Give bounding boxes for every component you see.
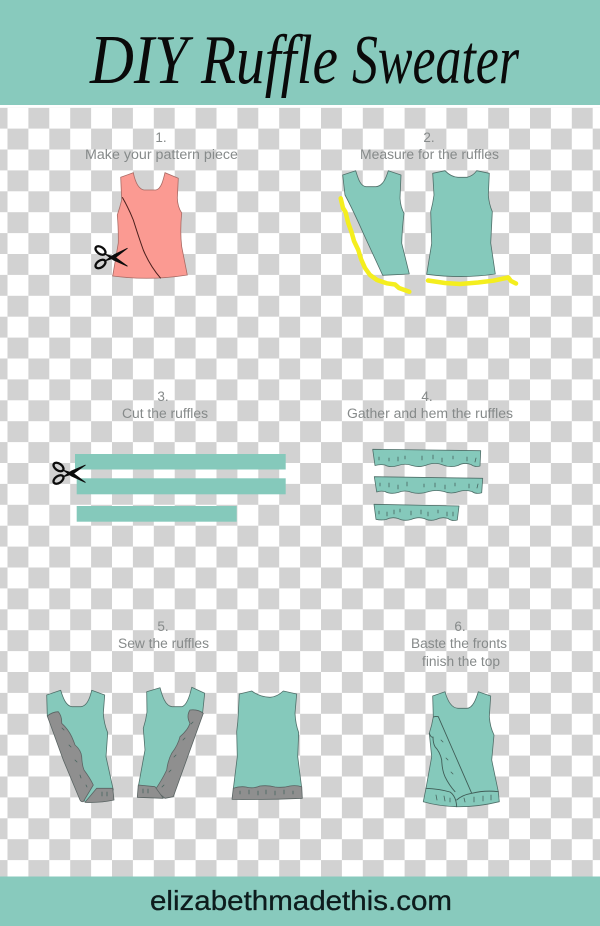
title: DIY: [89, 22, 194, 99]
grey hem ruffle: [85, 788, 114, 802]
step 2 heading: [360, 130, 499, 162]
peach pattern top: [113, 173, 187, 278]
step 6 heading: 6.: [454, 619, 466, 634]
title: Ruffle: [200, 22, 338, 99]
diagonal cutting line: [122, 197, 161, 278]
fabric strip 3: [77, 506, 237, 522]
step 3 heading: 3.: [157, 389, 169, 404]
step 6 heading: finish the top: [422, 654, 500, 669]
fabric strip 1: [75, 454, 286, 470]
yellow measuring line: diagonal: [341, 198, 409, 292]
left front with ruffle: [47, 690, 114, 802]
step 1 heading: [85, 130, 238, 162]
yellow measuring line: hem: [428, 278, 516, 284]
back piece: [427, 171, 495, 277]
step 2 heading: Measure for the ruffles: [360, 147, 499, 162]
step 4 heading: [347, 389, 513, 421]
step 6 heading: Baste the fronts: [411, 636, 507, 651]
step 3 heading: [122, 389, 208, 421]
grey diagonal ruffle: [47, 712, 93, 802]
panel: step 2 measure for the ruffles: [341, 130, 516, 292]
step 1 heading: 1.: [155, 130, 167, 145]
right front with ruffle: [137, 687, 205, 798]
fabric strip 2: [77, 478, 286, 494]
icon: scissors: [52, 461, 86, 485]
grey hem ruffle: [137, 785, 163, 798]
panel: step 6 baste the fronts, finish the top: [411, 619, 507, 807]
finished ruffle top: [423, 692, 499, 807]
step 4 heading: Gather and hem the ruffles: [347, 406, 513, 421]
front piece: [343, 171, 409, 275]
step 4 heading: 4.: [421, 389, 433, 404]
panel: step 5 sew the ruffles: [47, 619, 302, 802]
step 5 heading: 5.: [157, 619, 169, 634]
header banner: [0, 0, 600, 105]
ruffle 1: [373, 449, 481, 467]
website address: elizabethmadethis.com: [150, 885, 452, 916]
step 6 heading: [411, 619, 507, 669]
front panel and ruffle seams: [426, 716, 498, 807]
title: Sweater: [352, 22, 520, 99]
footer banner: [0, 876, 600, 926]
grey hem ruffle: [232, 786, 302, 800]
ruffle 3: [374, 504, 459, 520]
icon: scissors: [94, 245, 128, 270]
panel: step 4 gather and hem the ruffles: [347, 389, 513, 520]
panel: step 3 cut the ruffles: [52, 389, 286, 522]
panel: step 1 make your pattern piece: [85, 130, 238, 278]
step 1 heading: Make your pattern piece: [85, 147, 238, 162]
step 5 heading: [118, 619, 209, 651]
step 3 heading: Cut the ruffles: [122, 406, 208, 421]
ruffle 2: [374, 477, 483, 493]
step 5 heading: Sew the ruffles: [118, 636, 209, 651]
grey diagonal ruffle: [155, 710, 203, 798]
step 2 heading: 2.: [423, 130, 435, 145]
title: [89, 22, 520, 99]
back with hem ruffle: [232, 691, 302, 800]
